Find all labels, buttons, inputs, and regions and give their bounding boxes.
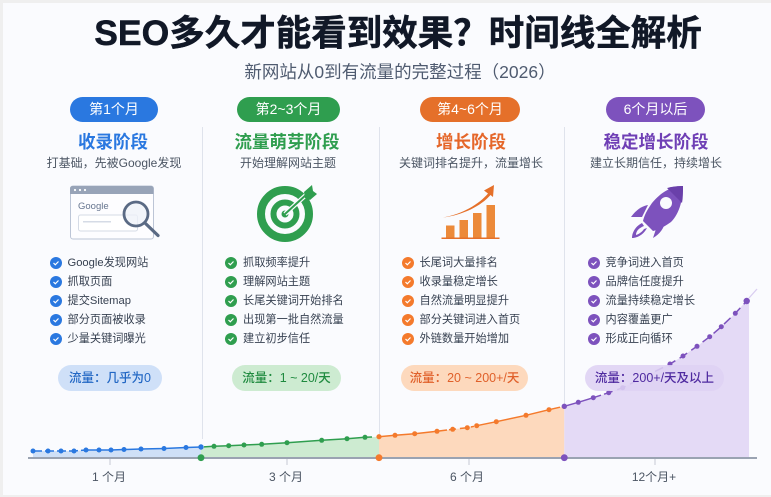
checklist: growth: 外链数量开始增加 xyxy=(420,333,509,345)
period pill: after 6 months: 6个月以后 xyxy=(624,101,687,117)
icon: browser with magnifier: Google xyxy=(78,201,109,212)
checklist: stable growth: 品牌信任度提升 xyxy=(606,276,684,288)
stage heading: growth: 增长阶段 xyxy=(436,132,506,152)
period pill: months 4-6: 第4~6个月 xyxy=(437,101,503,117)
checklist: indexing xyxy=(50,256,148,345)
traffic pill: sprouting xyxy=(232,365,341,391)
checklist: indexing: 抓取页面 xyxy=(68,276,112,288)
traffic pill: indexing xyxy=(58,365,162,391)
axis label: 12 months plus: 12个月+ xyxy=(632,470,676,484)
stage heading: stable growth: 稳定增长阶段 xyxy=(604,132,708,152)
checklist: indexing: Google发现网站 xyxy=(68,257,148,269)
icon: browser with magnifier xyxy=(70,186,160,240)
checklist: indexing: 少量关键词曝光 xyxy=(68,333,146,345)
axis label: 3 months: 3 个月 xyxy=(269,470,303,484)
icon: target with arrow xyxy=(257,185,317,242)
checklist: growth: 长尾词大量排名 xyxy=(420,257,498,269)
period pill: month 1 xyxy=(70,97,158,122)
checklist: indexing: 提交Sitemap xyxy=(68,295,131,307)
area: purple stage xyxy=(564,298,749,458)
area: green stage xyxy=(201,437,379,458)
stage description: indexing: 打基础，先被Google发现 xyxy=(47,156,181,170)
axis label: 6 months: 6 个月 xyxy=(450,470,484,484)
icon: rocket xyxy=(631,186,683,238)
period pill: months 2-3 xyxy=(237,97,340,122)
axis ticks xyxy=(110,459,655,465)
axis label: 1 month: 1 个月 xyxy=(92,470,126,484)
traffic pill: sprouting: 流量：1 ~ 20/天 xyxy=(242,371,331,385)
line: purple stage xyxy=(561,289,757,461)
checklist: sprouting: 理解网站主题 xyxy=(243,276,310,288)
checklist: stable growth xyxy=(588,256,695,345)
line: blue stage xyxy=(30,444,204,454)
icon: rising bar chart xyxy=(442,185,500,239)
checklist: indexing: 部分页面被收录 xyxy=(68,314,146,326)
checklist: sprouting: 长尾关键词开始排名 xyxy=(243,295,344,307)
checklist: sprouting xyxy=(225,256,344,345)
checklist: sprouting: 出现第一批自然流量 xyxy=(243,314,344,326)
subtitle: 新网站从0到有流量的完整过程（2026） xyxy=(244,62,556,82)
stage description: sprouting: 开始理解网站主题 xyxy=(240,156,336,170)
checklist: stable growth: 竞争词进入首页 xyxy=(606,257,684,269)
axis line xyxy=(28,457,757,459)
area: blue stage xyxy=(33,447,201,458)
checklist: growth: 自然流量明显提升 xyxy=(420,295,509,307)
period pill: months 4-6 xyxy=(420,97,520,122)
title: SEO多久才能看到效果？时间线全解析 xyxy=(94,13,702,53)
traffic pill: growth: 流量：20 ~ 200+/天 xyxy=(410,371,519,385)
stage description: stable growth: 建立长期信任，持续增长 xyxy=(590,156,722,170)
checklist: growth xyxy=(402,256,520,345)
line: green stage xyxy=(198,435,372,461)
stage description: growth: 关键词排名提升，流量增长 xyxy=(399,156,543,170)
period pill: month 1: 第1个月 xyxy=(89,101,139,117)
checklist: stable growth: 流量持续稳定增长 xyxy=(606,295,695,307)
line: orange stage xyxy=(376,407,560,461)
traffic pill: indexing: 流量：几乎为0 xyxy=(69,371,151,385)
traffic pill: stable growth xyxy=(585,365,724,391)
checklist: stable growth: 内容覆盖更广 xyxy=(606,314,673,326)
period pill: after 6 months xyxy=(606,97,705,122)
checklist: stable growth: 形成正向循环 xyxy=(606,333,673,345)
checklist: sprouting: 建立初步信任 xyxy=(243,333,310,345)
divider lines xyxy=(202,127,203,439)
stage heading: sprouting: 流量萌芽阶段 xyxy=(234,132,340,152)
traffic pill: growth xyxy=(401,365,528,391)
period pill: months 2-3: 第2~3个月 xyxy=(256,101,321,117)
checklist: growth: 收录量稳定增长 xyxy=(420,276,498,288)
stage heading: indexing: 收录阶段 xyxy=(78,132,148,152)
traffic pill: stable growth: 流量：200+/天及以上 xyxy=(595,371,714,385)
checklist: sprouting: 抓取频率提升 xyxy=(243,257,310,269)
area: orange stage xyxy=(379,406,564,458)
checklist: growth: 部分关键词进入首页 xyxy=(420,314,520,326)
